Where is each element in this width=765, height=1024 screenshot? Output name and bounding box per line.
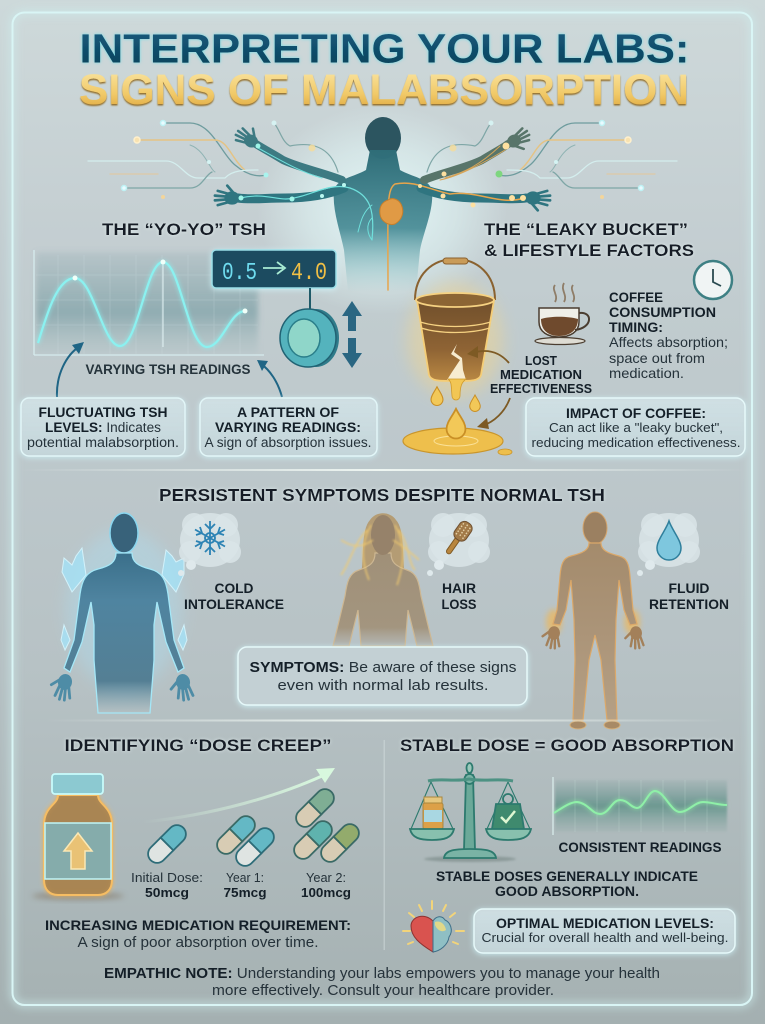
- text: coffee consumption timing: COFFEE: [609, 290, 663, 305]
- icon: year one pills: [213, 812, 278, 870]
- callout: fluctuating TSH levels: potential malabsorption.: [27, 435, 179, 450]
- dose labels: 50mcg: [145, 885, 189, 900]
- heading: PERSISTENT SYMPTOMS DESPITE NORMAL TSH: [159, 485, 605, 505]
- icon: heart: [380, 199, 403, 225]
- dose labels: 75mcg: [224, 885, 267, 900]
- arrow: box one to chart: [57, 342, 84, 397]
- text: coffee consumption timing: [609, 290, 728, 381]
- callout: pattern of varying readings: [200, 398, 377, 456]
- icon: balance scale: [410, 763, 531, 862]
- nerves and glowing nodes: [238, 142, 526, 290]
- callout: impact of coffee: IMPACT OF COFFEE:: [566, 406, 706, 421]
- heading: IDENTIFYING “DOSE CREEP”: [64, 736, 332, 755]
- panel: stable dose: [400, 736, 735, 953]
- label: hair loss: [442, 581, 476, 612]
- central body figure with nerve network: [88, 105, 677, 315]
- callout: fluctuating TSH levels: LEVELS: Indicates: [45, 420, 161, 435]
- chart caption: VARYING TSH READINGS: [86, 362, 250, 377]
- panel: yo-yo TSH: [21, 220, 377, 456]
- text: stable doses: [436, 868, 698, 899]
- title line two: SIGNS OF MALABSORPTION: [79, 66, 689, 114]
- label: fluid retention: FLUID: [668, 581, 710, 596]
- text: coffee consumption timing: Affects absorption;: [609, 334, 728, 350]
- heading: THE “YO-YO” TSH: [102, 220, 266, 239]
- icon: initial dose pill: [144, 821, 190, 867]
- icon: medication bottle: [32, 774, 124, 900]
- bottle on left pan: [424, 797, 442, 803]
- TSH value display: 0.5: [222, 260, 257, 287]
- dose labels: Year 1:: [226, 870, 264, 885]
- text: coffee consumption timing: medication.: [609, 365, 684, 381]
- TSH value display: [212, 250, 336, 288]
- dose labels: Year 2:: [306, 870, 346, 885]
- dose labels: [131, 870, 351, 900]
- puddle: [403, 428, 503, 454]
- arrow: label to puddle: [477, 398, 510, 429]
- ice crystals: [61, 548, 187, 650]
- TSH value display: 4.0: [291, 260, 327, 287]
- label: lost medication effectiveness: EFFECTIVENESS: [490, 382, 592, 396]
- thought bubble: hairbrush: [427, 513, 490, 576]
- arrow: box two to caption: [257, 360, 282, 397]
- dose labels: Initial Dose:: [131, 870, 203, 885]
- panel: persistent symptoms: [49, 485, 729, 729]
- empathic note: EMPATHIC NOTE: Understanding your labs empowers you to manage your health: [104, 966, 660, 982]
- label: fluid retention: RETENTION: [649, 597, 729, 612]
- body silhouette: [215, 117, 550, 292]
- text: coffee consumption timing: space out from: [609, 350, 705, 366]
- text: increasing medication requirement: [45, 917, 351, 951]
- callout: optimal medication levels: Crucial for overall health and well-being.: [482, 930, 728, 945]
- label: hair loss: HAIR: [442, 581, 476, 596]
- callout: optimal medication levels: [474, 909, 735, 953]
- icon: coffee cup: [535, 283, 589, 344]
- callout: symptoms: [238, 647, 527, 705]
- thought bubble: water drop: [637, 513, 700, 576]
- icon: leaking bucket: [403, 258, 512, 455]
- callout: pattern of varying readings: A sign of absorption issues.: [204, 435, 372, 450]
- panel: leaky bucket and lifestyle factors: [403, 220, 745, 456]
- text: stable doses: STABLE DOSES GENERALLY INDICATE: [436, 868, 698, 884]
- callout: impact of coffee: Can act like a "leaky bucket",: [549, 420, 723, 435]
- title line one: INTERPRETING YOUR LABS:: [80, 26, 690, 72]
- callout: fluctuating TSH levels: FLUCTUATING TSH: [38, 405, 168, 420]
- text: increasing medication requirement: A sign of poor absorption over time.: [78, 935, 318, 951]
- callout: impact of coffee: [526, 398, 745, 456]
- label: lost medication effectiveness: MEDICATION: [500, 368, 582, 382]
- figure: hair loss: [333, 513, 490, 646]
- label: hair loss: LOSS: [442, 597, 476, 612]
- figure: fluid retention: [542, 512, 729, 729]
- text: coffee consumption timing: TIMING:: [609, 320, 663, 335]
- empathic note: more effectively. Consult your healthcare provider.: [212, 983, 554, 999]
- text: increasing medication requirement: INCREASING MEDICATION REQUIREMENT:: [45, 917, 351, 933]
- callout: symptoms: SYMPTOMS: Be aware of these signs: [250, 659, 516, 676]
- icon: up and down arrows: [342, 301, 362, 368]
- label: lost medication effectiveness: LOST: [525, 354, 557, 368]
- icon: year two pills: [290, 785, 363, 866]
- text: stable doses: GOOD ABSORPTION.: [495, 883, 639, 899]
- weight with check on right pan: [503, 794, 513, 804]
- label: fluid retention: [649, 581, 729, 612]
- callout: impact of coffee: reducing medication effectiveness.: [532, 435, 740, 450]
- line chart: varying TSH readings: [34, 250, 264, 355]
- label: cold intolerance: COLD: [214, 581, 254, 596]
- label: cold intolerance: INTOLERANCE: [184, 597, 284, 612]
- panel: dose creep: [32, 736, 363, 951]
- callout: symptoms: even with normal lab results.: [278, 677, 488, 694]
- title: [79, 26, 690, 114]
- label: cold intolerance: [184, 581, 284, 612]
- heading: & LIFESTYLE FACTORS: [484, 241, 694, 260]
- heading: THE “LEAKY BUCKET”: [484, 220, 688, 239]
- chart caption: CONSISTENT READINGS: [558, 840, 722, 855]
- chart: consistent readings: [553, 777, 727, 835]
- arrow: label to bucket crack: [467, 346, 509, 363]
- thought bubble: snowflake: [178, 513, 241, 576]
- callout: optimal medication levels: OPTIMAL MEDICATION LEVELS:: [496, 916, 714, 931]
- label: lost medication effectiveness: [490, 354, 592, 396]
- callout: pattern of varying readings: A PATTERN OF: [237, 405, 339, 420]
- empathic note: [104, 966, 660, 999]
- callout: fluctuating TSH levels: [21, 398, 185, 456]
- callout: pattern of varying readings: VARYING READINGS:: [215, 420, 361, 435]
- heading: STABLE DOSE = GOOD ABSORPTION: [400, 736, 734, 755]
- heading: [484, 220, 694, 260]
- figure: cold intolerance: [49, 513, 284, 713]
- dose labels: 100mcg: [301, 885, 351, 900]
- icon: clock: [694, 261, 732, 299]
- icon: heart and brain: [403, 901, 464, 952]
- arrow: rising trend: [143, 768, 335, 822]
- text: coffee consumption timing: CONSUMPTION: [609, 305, 716, 320]
- icon: yo-yo: [280, 288, 339, 367]
